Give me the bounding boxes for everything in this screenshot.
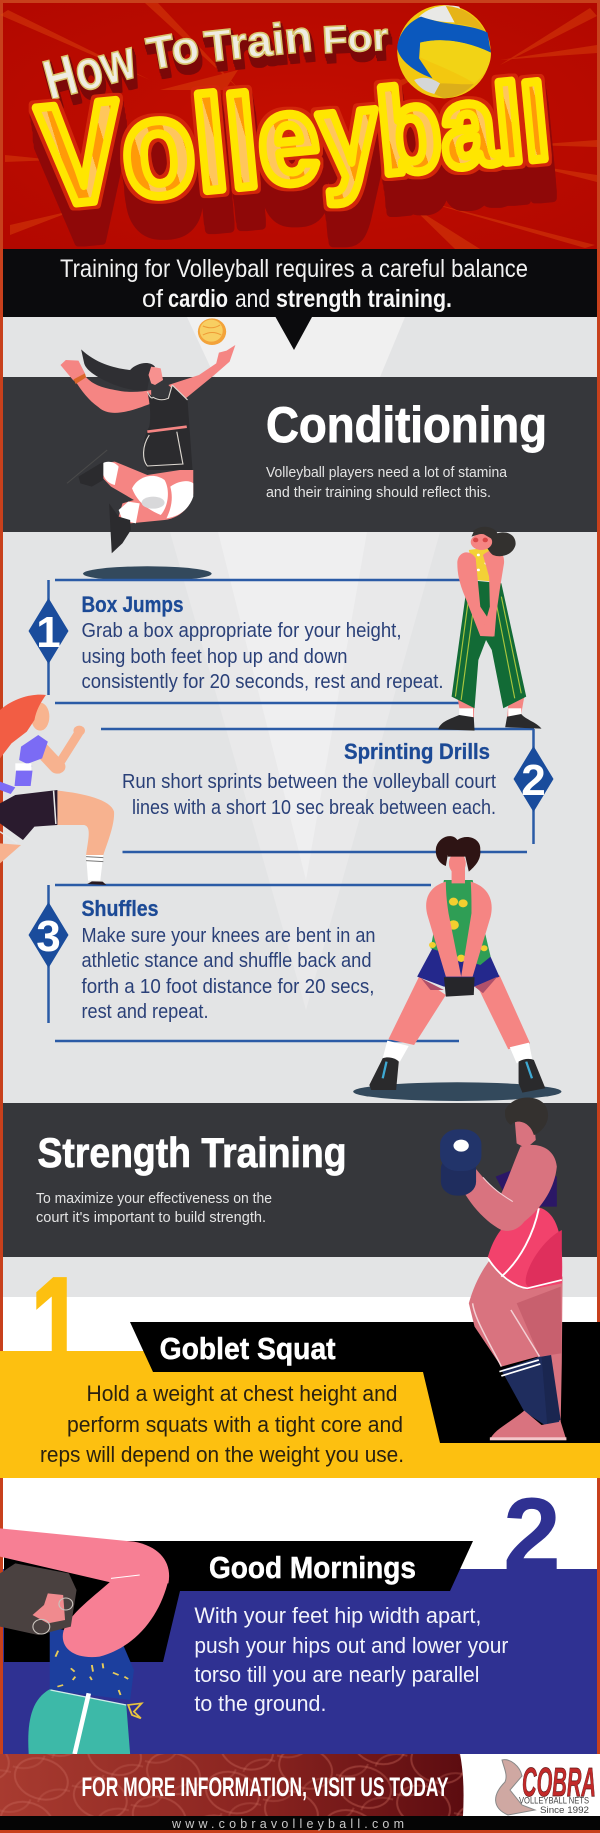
title: Volleyball: Volleyball (32, 30, 554, 237)
heading: Box Jumps: Box Jumps (82, 592, 184, 617)
box jumps body (82, 620, 444, 693)
conditioning description: and their training should reflect this. (266, 484, 491, 501)
title: How To Train For: How (37, 27, 142, 112)
badge: number 2: 2 (521, 756, 546, 805)
logo: cobra volleyball nets: Since 1992 (540, 1805, 589, 1815)
logo: cobra volleyball nets (496, 1759, 596, 1815)
panel: box jumps (28, 580, 460, 703)
heading: Shuffles: Shuffles (82, 896, 158, 921)
goblet squat body: Hold a weight at chest height and (86, 1381, 398, 1406)
badge: number 1: 1 (36, 608, 61, 657)
title: How To Train For: Train (202, 12, 314, 72)
intro text line 2: of (142, 285, 163, 313)
intro text line 2: strength training. (276, 285, 452, 313)
heading: Sprinting Drills: Sprinting Drills (344, 739, 490, 764)
panel: conditioning band (3, 377, 597, 532)
panel: shuffles (28, 885, 459, 1041)
icon: player bending forward (0, 1528, 169, 1754)
heading: Goblet Squat: Goblet Squat (160, 1331, 336, 1366)
title: How To Train For: To (143, 20, 203, 80)
sprinting drills body (122, 771, 496, 819)
icon: player holding dumbbell (440, 1097, 566, 1440)
logo: cobra volleyball nets: VOLLEYBALL NETS (519, 1796, 589, 1806)
panel: good mornings (3, 1477, 597, 1755)
box jumps body: consistently for 20 seconds, rest and repeat. (82, 671, 444, 693)
icon: standing player in green trousers (438, 527, 542, 731)
box jumps body: Grab a box appropriate for your height, (82, 620, 402, 642)
icon: volleyball (397, 5, 491, 98)
strength description (36, 1190, 272, 1226)
icon: squatting player with kettlebell (353, 836, 561, 1101)
icon: cobra snake (496, 1760, 535, 1815)
panel: strength training band (3, 1103, 597, 1257)
good mornings body: With your feet hip width apart, (194, 1603, 481, 1628)
heading: Good Mornings: Good Mornings (209, 1550, 416, 1585)
panel: sprinting drills (101, 729, 554, 852)
panel: header (0, 3, 597, 249)
goblet squat body (40, 1381, 404, 1467)
big number 2: 2 (503, 1477, 561, 1593)
sunburst rays (0, 3, 597, 249)
intro text line 2: cardio (168, 285, 228, 313)
sprinting drills body: lines with a short 10 sec break between each. (132, 797, 496, 819)
website address: www.cobravolleyball.com (171, 1817, 404, 1831)
shuffles body: Make sure your knees are bent in an (82, 925, 376, 947)
shuffles body: forth a 10 foot distance for 20 secs, (82, 976, 374, 998)
black title ribbon (130, 1322, 600, 1443)
good mornings body: torso till you are nearly parallel (194, 1662, 479, 1687)
big number 1: 1 (31, 1251, 83, 1397)
conditioning description: Volleyball players need a lot of stamina (266, 464, 508, 481)
box jumps body: using both feet hop up and down (82, 646, 348, 668)
good mornings body (194, 1603, 508, 1716)
sprinting drills body: Run short sprints between the volleyball court (122, 771, 496, 793)
title: How To Train For (37, 12, 390, 112)
heading: Conditioning: Conditioning (266, 397, 547, 453)
intro text line 2: and (235, 285, 270, 313)
good mornings body: to the ground. (194, 1691, 326, 1716)
title: How To Train For: For (321, 17, 390, 62)
shuffles body: athletic stance and shuffle back and (82, 950, 372, 972)
panel: goblet squat (0, 1251, 600, 1478)
badge: number 3: 3 (36, 912, 61, 961)
good mornings body: push your hips out and lower your (194, 1633, 508, 1658)
heading: Strength Training: Strength Training (38, 1129, 346, 1176)
pointer triangle (276, 317, 312, 350)
badge: number 1 (28, 598, 68, 664)
icon: running player (0, 695, 114, 885)
goblet squat body: perform squats with a tight core and (67, 1412, 403, 1437)
textured red band (0, 1754, 464, 1816)
conditioning description (266, 464, 508, 501)
intro text line 1: Training for Volleyball requires a careful balance (60, 255, 528, 283)
panel: footer (0, 1754, 600, 1831)
badge: number 3 (28, 902, 68, 968)
shuffles body (82, 925, 376, 1023)
grey background (3, 317, 597, 1297)
goblet squat body: reps will depend on the weight you use. (40, 1442, 404, 1467)
shuffles body: rest and repeat. (82, 1001, 208, 1023)
badge: number 2 (514, 746, 554, 812)
icon: jumping player (60, 318, 235, 581)
strength description: court it's important to build strength. (36, 1209, 266, 1226)
black title ribbon (4, 1541, 473, 1662)
panel: intro band (3, 249, 597, 350)
strength description: To maximize your effectiveness on the (36, 1190, 272, 1207)
intro text line 2 (142, 285, 452, 313)
